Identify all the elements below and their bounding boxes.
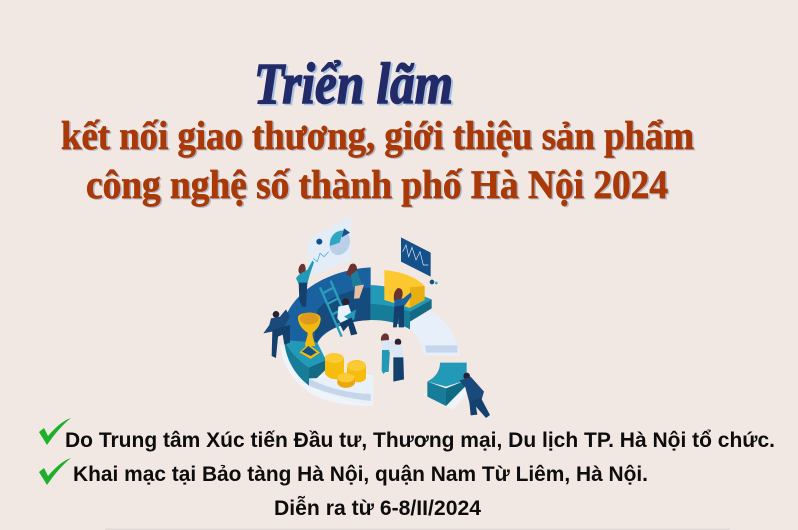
title: Triển lãm: Triển lãm [256, 52, 455, 118]
text: organiser: Do Trung tâm Xúc tiến Đầu tư, Thương mại, Du lịch TP. Hà Nội tổ chức. [65, 429, 775, 452]
trophy [298, 313, 321, 359]
ladder [320, 281, 353, 337]
icon: green check 1 [39, 418, 71, 445]
person: woman at yellow block [393, 288, 412, 327]
ring chart [280, 267, 470, 409]
person: woman at chart [296, 261, 314, 307]
coins [325, 353, 366, 388]
person: man with laptop [337, 298, 357, 335]
panel: pie and line chart [308, 215, 353, 277]
heading: exhibition subtitle: công nghệ số thành phố Hà Nội 2024 [88, 163, 670, 208]
text: opening venue: Khai mạc tại Bảo tàng Hà Nội, quận Nam Từ Liêm, Hà Nội. [73, 463, 648, 486]
illustration: isometric ring chart with business people [263, 215, 490, 418]
person: man jumping at left [263, 309, 290, 358]
person: man pushing block [459, 373, 490, 418]
heading: exhibition subtitle: công nghệ số thành phố Hà Nội 2024 [86, 162, 668, 207]
text: dates: Diễn ra từ 6-8/II/2024 [274, 496, 481, 520]
heading: exhibition subtitle: kết nối giao thương, giới thiệu sản phẩm [62, 114, 696, 159]
person: woman sitting with tablet [346, 264, 364, 299]
panel: dark line chart [401, 237, 438, 284]
heading: exhibition subtitle: kết nối giao thương, giới thiệu sản phẩm [61, 113, 694, 158]
title: Triển lãm: Triển lãm [254, 51, 453, 116]
icon: green check 2 [39, 458, 71, 485]
heading: exhibition subtitle [61, 113, 696, 208]
people: man and woman talking [381, 333, 404, 382]
